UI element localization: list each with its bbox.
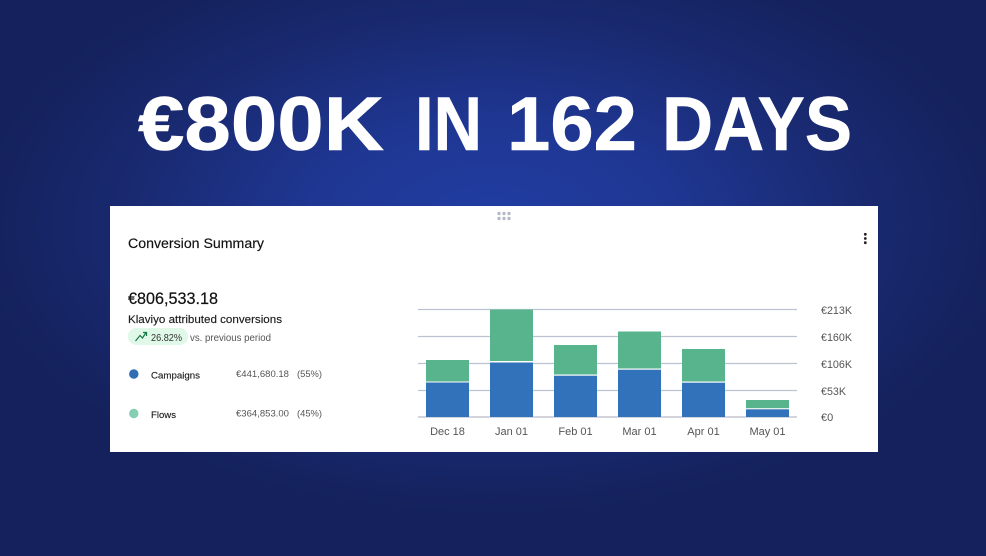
y axis labels: €213K [821,305,853,317]
bar chart [418,305,853,438]
y axis labels: €53K [821,386,847,398]
legend: flows: Flows [151,410,176,421]
icon: trend up arrow [136,332,146,341]
growth badge: 26.82% [151,333,182,344]
bar: May 01 [746,400,789,417]
bar: Apr 01 [682,349,725,417]
panel: conversion summary [110,206,878,452]
bar: Mar 01 [618,332,661,417]
growth badge [128,328,188,345]
legend: flows: (45%) [297,408,322,420]
comparison label: vs. previous period [190,333,271,344]
legend: flows: €364,853.00 [236,408,289,420]
bar: Dec 18 [426,360,469,417]
title: IN [415,82,482,167]
panel heading: Conversion Summary [128,236,264,251]
legend: campaigns [129,369,322,382]
title [138,82,852,167]
legend: campaigns: (55%) [297,369,322,380]
x axis labels: May 01 [749,426,786,438]
bar: Feb 01 [554,345,597,417]
x axis labels: Feb 01 [558,426,593,438]
x axis labels: Mar 01 [622,426,657,438]
legend: campaigns: €441,680.18 [236,369,289,380]
y axis labels: €160K [821,332,853,344]
bar: Jan 01 [490,310,533,417]
y axis labels: €0 [821,412,833,424]
y axis labels [821,305,853,424]
metric label: Klaviyo attributed conversions [128,314,283,326]
title: DAYS [662,82,852,167]
x axis labels: Dec 18 [430,426,465,438]
title: 162 [507,82,637,167]
total value: €806,533.18 [128,290,218,308]
legend: flows [129,408,322,421]
legend: campaigns: Campaigns [151,370,200,382]
x axis labels: Apr 01 [687,426,720,438]
y axis labels: €106K [821,359,853,371]
x axis labels: Jan 01 [495,426,528,438]
title: €800K [138,82,384,167]
icon: more menu [864,233,867,244]
icon: drag handle [497,212,511,220]
x axis labels [430,426,786,438]
